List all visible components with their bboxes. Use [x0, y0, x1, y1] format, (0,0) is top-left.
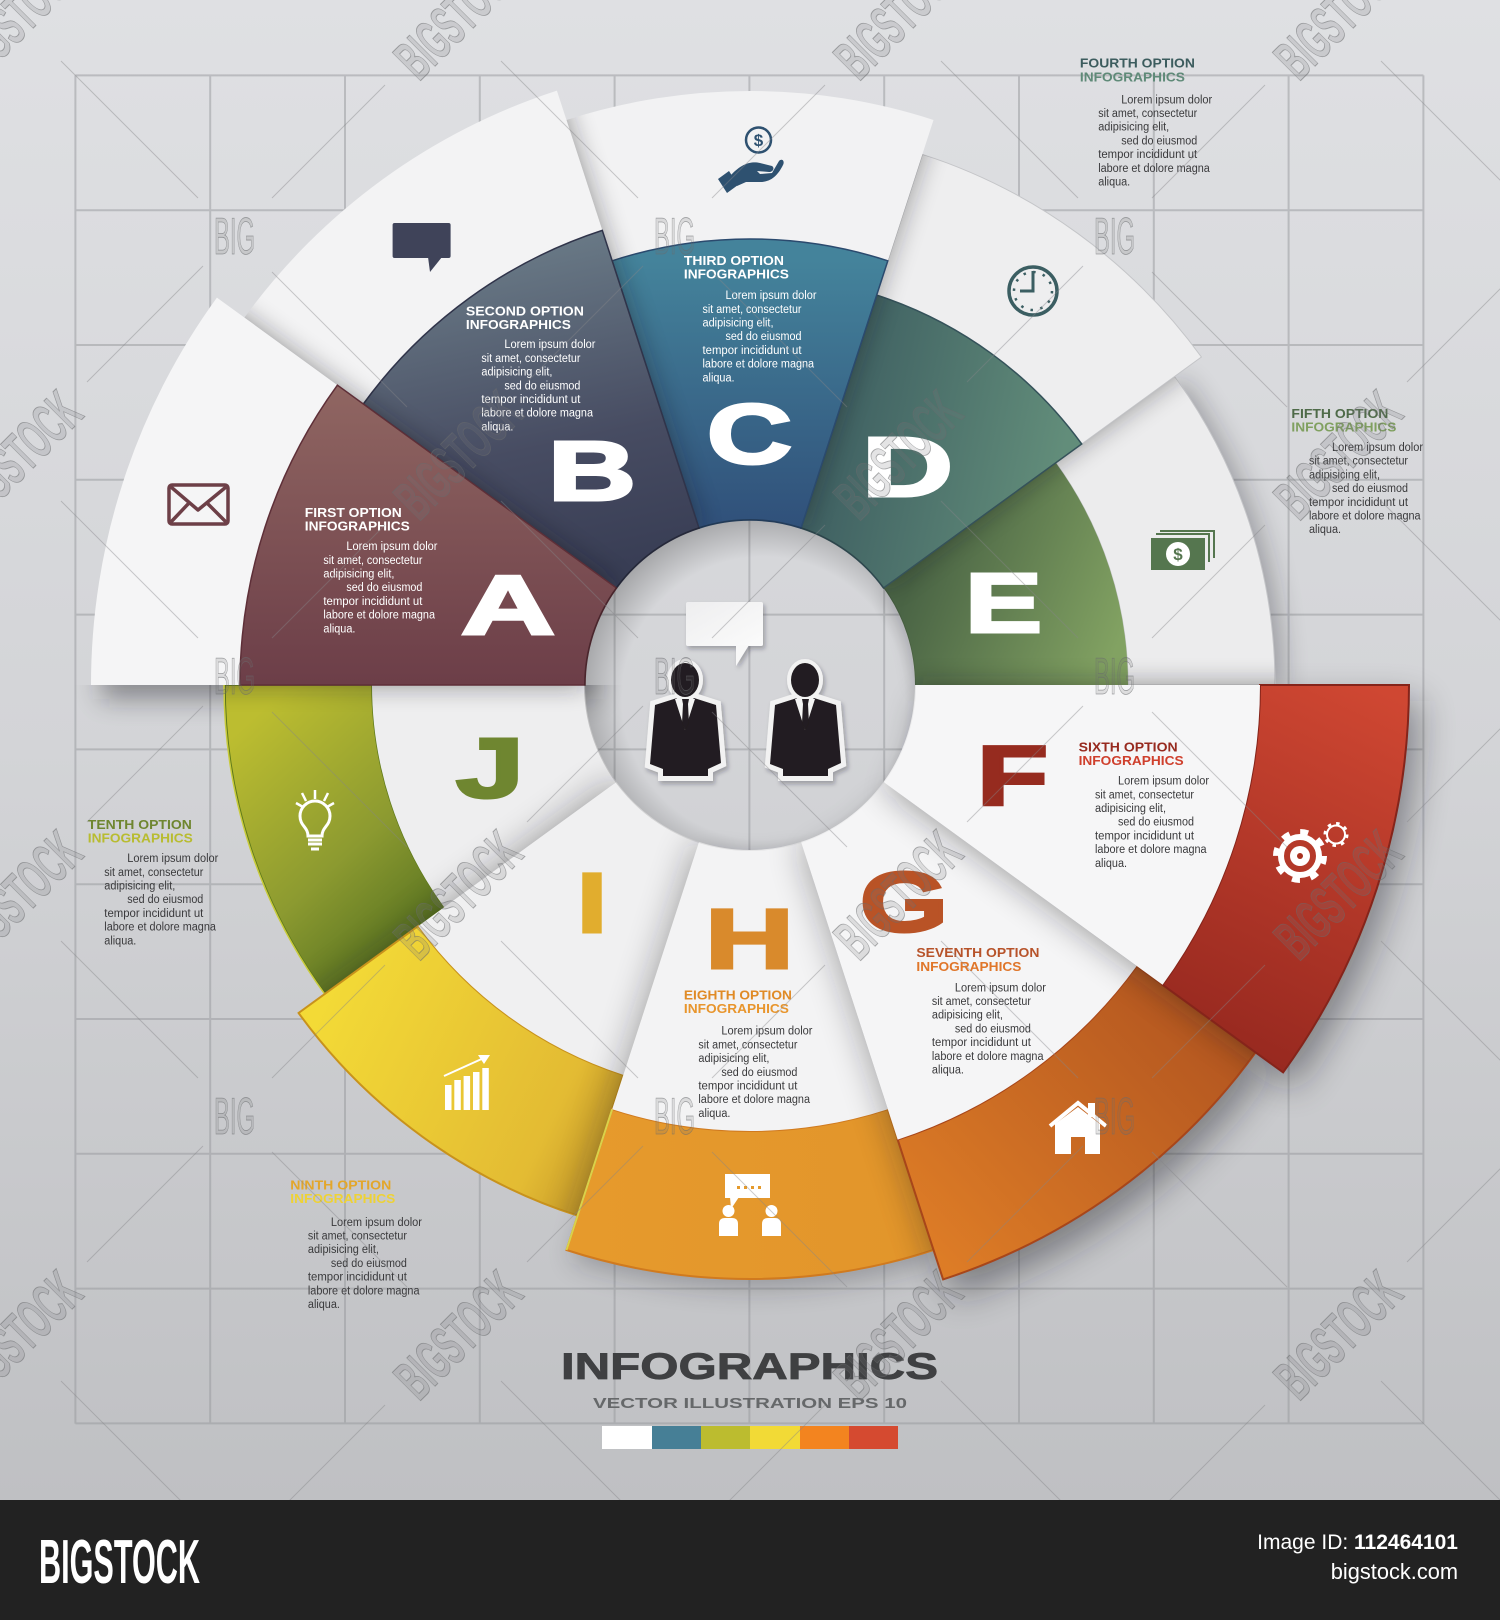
text block: first option: tempor incididunt ut: [323, 596, 423, 608]
watermark: BIGSTOCK tiles: BIGSTOCK: [382, 379, 534, 531]
text block: fifth option: [1291, 407, 1423, 536]
text block: third option: sit amet, consectetur: [702, 304, 802, 316]
text block: tenth option: [88, 818, 218, 947]
text block: tenth option: Lorem ipsum dolor: [127, 853, 218, 865]
panel: wedge D: [801, 154, 1201, 588]
text block: eighth option: INFOGRAPHICS: [684, 1002, 789, 1016]
text block: tenth option: labore et dolore magna: [104, 922, 216, 934]
icon: blank speech bubble: [686, 602, 763, 666]
text block: first option: [305, 506, 438, 635]
panel: wedge H: [566, 842, 934, 1279]
text block: ninth option: labore et dolore magna: [308, 1285, 420, 1297]
text block: first option: Lorem ipsum dolor: [346, 541, 438, 553]
text block: fifth option: tempor incididunt ut: [1309, 497, 1409, 509]
text block: second option: sit amet, consectetur: [481, 353, 581, 365]
text block: third option: aliqua.: [702, 372, 734, 384]
text block: fifth option: labore et dolore magna: [1309, 510, 1421, 522]
text block: sixth option: sed do eiusmod: [1118, 817, 1194, 829]
text block: fourth option: adipisicing elit,: [1098, 122, 1169, 134]
text block: first option: INFOGRAPHICS: [305, 520, 410, 534]
text block: second option: tempor incididunt ut: [481, 394, 581, 406]
text block: fifth option: sed do eiusmod: [1332, 483, 1408, 495]
panel: wedge A: [91, 298, 616, 685]
text block: ninth option: Lorem ipsum dolor: [331, 1217, 422, 1229]
text block: tenth option: sit amet, consectetur: [104, 867, 203, 879]
icon: right businessman: [770, 663, 841, 776]
text block: sixth option: INFOGRAPHICS: [1079, 754, 1184, 768]
text block: second option: SECOND OPTION: [466, 305, 584, 319]
text block: tenth option: aliqua.: [104, 935, 136, 947]
watermark: BIG tiles: [214, 208, 1135, 1146]
text block: ninth option: NINTH OPTION: [290, 1179, 391, 1193]
text block: third option: sed do eiusmod: [726, 331, 802, 343]
text block: sixth option: labore et dolore magna: [1095, 844, 1207, 856]
infographic canvas: BIG: [1094, 208, 1135, 266]
text block: tenth option: tempor incididunt ut: [104, 908, 204, 920]
text block: seventh option: Lorem ipsum dolor: [955, 982, 1046, 994]
text block: eighth option: tempor incididunt ut: [698, 1080, 798, 1092]
icon: banknotes: $: [1173, 545, 1183, 564]
text block: third option: THIRD OPTION: [684, 254, 784, 268]
text block: sixth option: SIXTH OPTION: [1079, 741, 1178, 755]
watermark: BIG tiles: BIG: [654, 1088, 695, 1146]
text block: ninth option: INFOGRAPHICS: [290, 1192, 395, 1206]
letter F: F: [977, 729, 1048, 823]
text block: second option: sed do eiusmod: [504, 380, 580, 392]
panel: wedge I: [299, 782, 699, 1216]
text block: second option: Lorem ipsum dolor: [504, 339, 596, 351]
panel: wedge C: [566, 91, 934, 528]
text block: fifth option: Lorem ipsum dolor: [1332, 442, 1423, 454]
text block: first option: adipisicing elit,: [323, 568, 394, 580]
text block: first option: FIRST OPTION: [305, 506, 402, 520]
text block: ninth option: tempor incididunt ut: [308, 1272, 408, 1284]
text block: seventh option: [916, 946, 1046, 1076]
watermark: BIGSTOCK tiles: BIGSTOCK: [822, 819, 974, 971]
text block: fourth option: sed do eiusmod: [1121, 135, 1197, 147]
text block: eighth option: Lorem ipsum dolor: [721, 1026, 813, 1038]
letter E: E: [965, 556, 1042, 650]
text block: seventh option: INFOGRAPHICS: [916, 960, 1021, 974]
panel: wedge J: [224, 685, 616, 994]
footer site: bigstock.com: [1331, 1559, 1458, 1584]
text block: tenth option: sed do eiusmod: [127, 894, 203, 906]
panel: center people talking: [584, 519, 916, 851]
text block: fourth option: sit amet, consectetur: [1098, 108, 1197, 120]
watermark: BIGSTOCK tiles: BIGSTOCK: [382, 819, 534, 971]
panel: wedge F: [884, 685, 1409, 1072]
letter B: B: [548, 424, 636, 518]
text block: eighth option: adipisicing elit,: [698, 1053, 769, 1065]
text block: sixth option: Lorem ipsum dolor: [1118, 776, 1209, 788]
text block: seventh option: tempor incididunt ut: [932, 1037, 1032, 1049]
text block: eighth option: EIGHTH OPTION: [684, 988, 792, 1002]
text block: third option: tempor incididunt ut: [702, 345, 802, 357]
letter I: I: [577, 856, 607, 950]
icon: speech bubble: [393, 223, 451, 272]
icon: envelope: [169, 485, 228, 524]
text block: eighth option: [684, 988, 813, 1120]
panel: wedge G: [801, 782, 1256, 1279]
text block: fifth option: FIFTH OPTION: [1291, 407, 1388, 421]
watermark: BIGSTOCK tiles: BIGSTOCK: [382, 1259, 534, 1411]
text block: eighth option: labore et dolore magna: [698, 1094, 811, 1106]
watermark: BIG tiles: BIG: [654, 648, 695, 706]
text block: first option: sit amet, consectetur: [323, 555, 423, 567]
text block: fourth option: labore et dolore magna: [1098, 163, 1210, 175]
subtitle: VECTOR ILLUSTRATION EPS 10: [593, 1395, 907, 1412]
icon: banknotes: [1151, 531, 1214, 570]
text block: tenth option: INFOGRAPHICS: [88, 832, 193, 846]
text block: eighth option: sit amet, consectetur: [698, 1039, 798, 1051]
text block: second option: aliqua.: [481, 421, 513, 433]
text block: sixth option: [1079, 741, 1209, 870]
wheel shadow on background: [101, 312, 1419, 1297]
text block: fourth option: Lorem ipsum dolor: [1121, 94, 1212, 106]
text block: seventh option: SEVENTH OPTION: [916, 946, 1039, 960]
footer bar: BIGSTOCK: [39, 1528, 200, 1597]
watermark: BIGSTOCK tiles: BIGSTOCK: [822, 379, 974, 531]
text block: tenth option: adipisicing elit,: [104, 880, 175, 892]
text block: ninth option: sed do eiusmod: [331, 1258, 407, 1270]
text block: sixth option: sit amet, consectetur: [1095, 789, 1194, 801]
letter G: G: [860, 855, 948, 949]
panel: wedge E: [884, 376, 1275, 685]
text block: first option: aliqua.: [323, 623, 355, 635]
letter A: A: [461, 558, 555, 652]
text block: seventh option: sed do eiusmod: [955, 1023, 1031, 1035]
letter H: H: [705, 892, 794, 986]
text block: third option: Lorem ipsum dolor: [726, 290, 817, 302]
watermark: BIG tiles: BIG: [214, 648, 255, 706]
text block: sixth option: tempor incididunt ut: [1095, 830, 1195, 842]
text block: fourth option: aliqua.: [1098, 176, 1130, 188]
text block: seventh option: aliqua.: [932, 1064, 964, 1076]
text block: sixth option: adipisicing elit,: [1095, 803, 1166, 815]
letter C: C: [707, 387, 792, 481]
watermark: BIG tiles: BIG: [654, 208, 695, 266]
title: INFOGRAPHICS: [561, 1346, 938, 1387]
text block: fourth option: INFOGRAPHICS: [1080, 70, 1185, 84]
icon: hand holding coin: $: [754, 131, 764, 150]
text block: first option: sed do eiusmod: [346, 582, 422, 594]
text block: second option: adipisicing elit,: [481, 367, 552, 379]
icon: meeting people: [719, 1174, 781, 1236]
text block: ninth option: aliqua.: [308, 1299, 340, 1311]
watermark: BIGSTOCK tiles: BIGSTOCK: [822, 1259, 974, 1411]
colour swatches: [602, 1426, 898, 1449]
text block: ninth option: [290, 1179, 422, 1311]
text block: fourth option: [1080, 57, 1212, 188]
text block: second option: labore et dolore magna: [481, 408, 594, 420]
text block: fifth option: INFOGRAPHICS: [1291, 420, 1396, 434]
text block: third option: labore et dolore magna: [702, 359, 815, 371]
text block: ninth option: adipisicing elit,: [308, 1244, 379, 1256]
watermark: BIG tiles: BIG: [214, 1088, 255, 1146]
icon: left businessman: [650, 663, 721, 776]
text block: eighth option: aliqua.: [698, 1108, 730, 1120]
icon: rising bar chart: [444, 1055, 490, 1110]
icon: light bulb: [296, 790, 334, 849]
infographic canvas: BIG: [1094, 648, 1135, 706]
text block: sixth option: aliqua.: [1095, 858, 1127, 870]
text block: second option: [466, 305, 596, 433]
letter D: D: [862, 420, 953, 514]
text block: fifth option: adipisicing elit,: [1309, 469, 1380, 481]
text block: seventh option: labore et dolore magna: [932, 1051, 1044, 1063]
icon: gears: [1276, 824, 1347, 880]
text block: fifth option: aliqua.: [1309, 524, 1341, 536]
text block: fourth option: FOURTH OPTION: [1080, 57, 1195, 71]
text block: fifth option: sit amet, consectetur: [1309, 456, 1408, 468]
icon: house: [1050, 1103, 1106, 1154]
text block: seventh option: sit amet, consectetur: [932, 996, 1031, 1008]
text block: tenth option: TENTH OPTION: [88, 818, 192, 832]
infographic canvas: BIG: [1094, 1088, 1135, 1146]
footer bar: [0, 1500, 1500, 1620]
footer image id: Image ID: 112464101: [1257, 1531, 1458, 1554]
panel: wedge B: [244, 91, 699, 588]
icon: clock: [1009, 267, 1057, 315]
text block: eighth option: sed do eiusmod: [721, 1067, 797, 1079]
center hole rim shading: [584, 519, 916, 851]
text block: third option: adipisicing elit,: [702, 318, 774, 330]
letter J: J: [456, 721, 524, 815]
text block: fourth option: tempor incididunt ut: [1098, 149, 1198, 161]
watermark: BIG tiles: BIG: [214, 208, 255, 266]
text block: first option: labore et dolore magna: [323, 610, 436, 622]
text block: second option: INFOGRAPHICS: [466, 318, 571, 332]
text block: third option: [684, 254, 817, 384]
text block: seventh option: adipisicing elit,: [932, 1010, 1003, 1022]
text block: third option: INFOGRAPHICS: [684, 268, 789, 282]
icon: hand holding coin: [718, 128, 784, 193]
text block: ninth option: sit amet, consectetur: [308, 1231, 407, 1243]
